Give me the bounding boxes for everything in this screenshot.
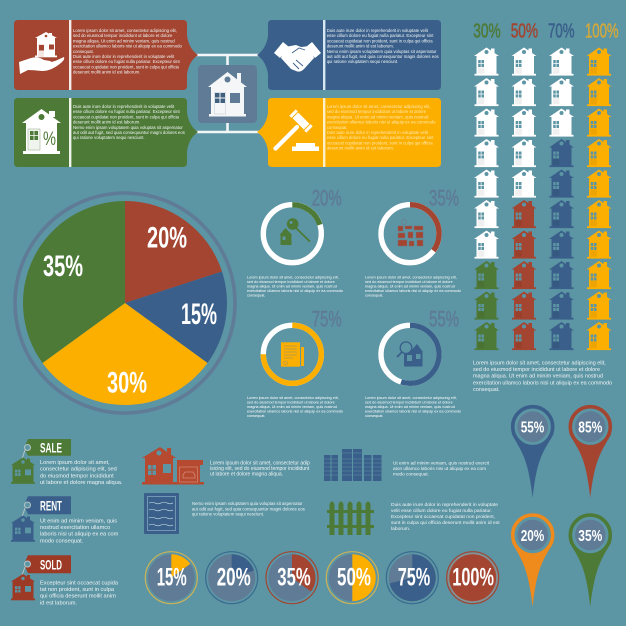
panel text: red	[73, 28, 182, 75]
text: swimming pool: qui ratione voluptatem sequi nesciunt.	[192, 512, 264, 517]
icon: apartment blocks	[324, 449, 382, 481]
map pin: 20%	[512, 515, 554, 607]
donut text: 75%: consequat.	[247, 414, 265, 418]
pie chart: 15%	[181, 298, 217, 331]
text: fence	[391, 502, 500, 532]
panel text: yellow: esse cillum dolore eu fugiat nulla pariatur. Excepteur sint	[327, 135, 434, 140]
text: garage house	[210, 460, 310, 478]
panel text: green: qui ratione voluptatem sequi nesciunt.	[73, 135, 145, 140]
small pie: 15%: 15%	[157, 564, 187, 592]
text: apartment blocks: Ut enim ad minim veniam, quis nostrud exercit	[393, 460, 490, 465]
panel text: red: deserunt mollit anim id est laborum.	[73, 70, 140, 75]
small pie: 15%	[145, 552, 197, 604]
small pie: 100%	[447, 552, 499, 604]
small pie: 100%: 100%	[452, 564, 494, 592]
panel text: yellow: Lorem ipsum dolor sit amet, consectetur adipiscing elit,	[327, 104, 431, 109]
small pie: 75%	[386, 552, 438, 604]
panel text: red: exercitation ullamco laboris nisi ut aliquip ex ea commodo	[73, 44, 182, 49]
donut text: 55%: sed do eiusmod tempor incididunt ut labore et dolore	[365, 400, 453, 404]
text block under house chart	[473, 360, 612, 393]
map pin: 55%: 55%	[521, 420, 544, 437]
panel text: green: esse cillum dolore eu fugiat nulla pariatur. Excepteur sint	[73, 109, 181, 114]
panel text: blue: deserunt mollit anim id est laborum.	[327, 44, 394, 49]
panel text: green	[73, 104, 185, 140]
donut text: 35%: Lorem ipsum dolor sit amet, consectetur adipiscing elit,	[365, 276, 457, 280]
donut text: 35%: consequat.	[365, 294, 383, 298]
rent tag group: laboris nisi ut aliquip ex ea com	[40, 532, 119, 538]
house chart: 50% column	[512, 48, 536, 350]
panel text: yellow: consequat.	[327, 125, 348, 130]
panel text: green: Nemo enim ipsam voluptatem quia voluptas sit aspernatur	[73, 125, 183, 130]
panel text: yellow: magna aliqua. Ut enim ad minim veniam, quis nostrud	[327, 114, 429, 119]
small pie: 20%: 20%	[217, 564, 251, 592]
text: apartment blocks: modo consequat.	[393, 472, 429, 477]
sale tag group	[11, 439, 123, 486]
small pie: 35%: 35%	[277, 564, 311, 592]
donut text: 75%: exercitation ullamco laboris nisi ut aliquip ex ea commodo	[247, 410, 343, 414]
pie chart: 35%	[43, 250, 83, 283]
panel text: yellow: exercitation ullamco laboris nisi ut aliquip ex ea commodo	[327, 120, 436, 125]
donut text: 55%: consequat.	[365, 414, 383, 418]
donut: 55% house search: 55%	[429, 307, 459, 332]
text: apartment blocks: aton ullamco laboris nisi ut aliquip ex ea com	[393, 466, 486, 471]
donut text: 20%: exercitation ullamco laboris nisi ut aliquip ex ea commodo	[247, 289, 343, 293]
panel text: red: sed do eiusmod tempor incididunt ut labore et dolore	[73, 33, 173, 38]
house chart: 70% column	[549, 48, 574, 350]
panel text: yellow: sed do eiusmod tempor incididunt ut labore et dolore	[327, 109, 427, 114]
house chart headings: 30%	[473, 20, 501, 42]
panel text: blue: qui ratione voluptatem sequi nesciunt.	[327, 59, 398, 64]
donut text: 20%: magna aliqua. Ut enim ad minim veniam, quis nostrud	[247, 284, 337, 288]
sold tag group	[11, 555, 119, 606]
panel text: red: Lorem ipsum dolor sit amet, consectetur adipiscing elit,	[73, 28, 177, 33]
sale tag group: consectetur adipiscing elit, sed	[40, 467, 117, 473]
house chart headings	[473, 20, 619, 42]
panel text: yellow	[327, 104, 436, 151]
panel: green percent house	[14, 98, 198, 167]
rent tag group: nostrud exercitation ullamco	[40, 525, 110, 531]
small pie: 35%	[266, 552, 318, 604]
text: garage house: ut labore et dolore magna aliqua.	[210, 472, 283, 478]
rent tag group: modo consequat.	[40, 538, 84, 544]
map pin: 20%: 20%	[521, 528, 544, 545]
icon: document	[281, 342, 304, 367]
rent tag group: RENT	[40, 498, 62, 514]
pie chart: 20%	[147, 222, 187, 255]
map pin: 85%: 85%	[578, 420, 602, 437]
donut text: 55%	[365, 396, 461, 418]
icon: house and key	[280, 218, 310, 245]
small pie: 50%	[326, 552, 378, 604]
icon: city plan	[398, 220, 423, 246]
donut: 75% document: 75%	[312, 307, 342, 332]
donut text: 35%: magna aliqua. Ut enim ad minim veniam, quis nostrud	[365, 284, 455, 288]
panel text: blue: occaecat cupidatat non proident, sunt in culpa qui officia	[327, 38, 433, 43]
panel text: red: consequat.	[73, 49, 94, 54]
rent tag group: Ut enim ad minim veniam, quis	[40, 518, 117, 524]
icon: gavel	[276, 109, 319, 151]
text: fence: laborum.	[391, 526, 410, 532]
panel text: blue: Duis aute irure dolor in reprehenderit in voluptate velit	[327, 28, 429, 33]
text: swimming pool	[192, 501, 305, 517]
panel text: yellow: occaecat cupidatat non proident, sunt in culpa qui officia	[327, 140, 433, 145]
icon: handshake	[274, 42, 321, 72]
map pin: 35%: 35%	[578, 528, 602, 545]
donut text: 55%: exercitation ullamco laboris nisi ut aliquip ex ea commodo	[365, 410, 461, 414]
donut text: 75%	[247, 396, 343, 418]
donut text: 55%: Lorem ipsum dolor sit amet, consectetur adipiscing elit,	[365, 396, 457, 400]
panel text: green: deserunt mollit anim id est laborum.	[73, 120, 140, 125]
pie chart: 30%	[107, 367, 147, 400]
donut text: 20%: sed do eiusmod tempor incididunt ut labore et dolore	[247, 280, 335, 284]
panel text: red: magna aliqua. Ut enim ad minim veniam, quis nostrud	[73, 38, 175, 43]
house chart: 100% column	[586, 48, 612, 350]
sold tag group: qui officia deserunt mollit anim	[40, 594, 116, 600]
panel text: red: esse cillum dolore eu fugiat nulla pariatur. Excepteur sint	[73, 59, 181, 64]
icon: magnifier over house	[397, 342, 423, 366]
map pin: 35%	[569, 515, 611, 607]
donut: 20% keys: 20%	[312, 186, 342, 211]
small pie: 50%: 50%	[337, 564, 371, 592]
donut: 20% keys	[263, 186, 342, 263]
panel text: yellow: deserunt mollit anim id est laborum.	[327, 146, 394, 151]
panel text: green: occaecat cupidatat non proident, sunt in culpa qui officia	[73, 114, 180, 119]
text block under house chart: consequat.	[473, 387, 500, 393]
panel: blue handshake	[257, 20, 441, 90]
donut text: 75%: sed do eiusmod tempor incididunt ut labore et dolore	[247, 400, 335, 404]
sale tag group: ut labore et dolore magna aliqua.	[40, 480, 123, 486]
donut text: 55%: magna aliqua. Ut enim ad minim veniam, quis nostrud	[365, 405, 455, 409]
donut: 35% plan: 35%	[429, 186, 459, 211]
text: fence: Excepteur sint occaecat cupidatat non proident,	[391, 514, 495, 520]
donut: 75% document	[263, 307, 342, 383]
panel: central house	[198, 65, 257, 123]
pie chart	[15, 193, 235, 413]
panel text: yellow: Duis aute irure dolor in reprehenderit in voluptate velit	[327, 130, 429, 135]
text: fence: velit esse cillum dolore eu fugiat nulla pariatur.	[391, 508, 492, 514]
house chart headings: 70%	[548, 20, 575, 42]
text: fence: Duis aute irure dolor in reprehenderit in voluptate	[391, 502, 498, 508]
sold tag group: SOLD	[40, 556, 62, 572]
small pie: 20%	[206, 552, 258, 604]
map pin: 85%	[569, 407, 611, 498]
text: swimming pool: Nemo enim ipsam voluptatem quia voluptas sit aspernatur	[192, 501, 303, 506]
sale tag group: SALE	[40, 440, 62, 456]
donut: 55% house search	[381, 307, 459, 383]
donut text: 75%: magna aliqua. Ut enim ad minim veniam, quis nostrud	[247, 405, 337, 409]
panel text: green: Duis aute irure dolor in reprehenderit in voluptate velit	[73, 104, 175, 109]
text: garage house: Lorem ipsum dolor sit amet, consectetur adip	[210, 460, 310, 466]
text: fence: sunt in culpa qui officia deserunt mollit anim id est	[391, 520, 500, 526]
icon: swimming pool	[144, 493, 179, 534]
text block under house chart: Lorem ipsum dolor sit amet, consectetur adipiscing elit,	[473, 360, 606, 366]
donut text: 20%: Lorem ipsum dolor sit amet, consectetur adipiscing elit,	[247, 276, 339, 280]
donut: 35% plan	[381, 186, 459, 263]
text: garage house: isicing elit, sed do eiusmod tempor incididunt	[210, 466, 310, 472]
icon: fence	[327, 502, 374, 535]
sale tag group: do eiusmod tempor incididunt	[40, 473, 114, 479]
icon: house with percent: %	[43, 129, 56, 150]
text: apartment blocks	[393, 460, 490, 477]
house chart headings: 50%	[511, 20, 538, 42]
small pie: 75%: 75%	[398, 564, 430, 592]
connector lines	[196, 55, 259, 132]
panel text: red: Duis aute irure dolor in reprehenderit in voluptate velit	[73, 54, 175, 59]
map pin: 55%	[512, 407, 554, 498]
icon: house with percent	[22, 109, 61, 154]
house chart: 30% column	[474, 48, 499, 350]
text block under house chart: magna aliqua. Ut enim ad minim veniam, quis nostrud	[473, 374, 603, 380]
text: swimming pool: aut odit aut fugit, sed quia consequuntur magni dolores eos	[192, 506, 305, 511]
icon: hand holding house	[19, 32, 64, 74]
panel text: red: occaecat cupidatat non proident, sunt in culpa qui officia	[73, 64, 180, 69]
donut text: 20%: consequat.	[247, 294, 265, 298]
sold tag group: id est laborum.	[40, 600, 77, 606]
donut text: 35%: sed do eiusmod tempor incididunt ut labore et dolore	[365, 280, 453, 284]
donut text: 75%: Lorem ipsum dolor sit amet, consectetur adipiscing elit,	[247, 396, 339, 400]
panel text: blue	[327, 28, 439, 64]
panel: yellow gavel	[257, 98, 441, 167]
panel text: green: aut odit aut fugit, sed quia consequuntur magni dolores eos	[73, 130, 185, 135]
sold tag group: tat non proident, sunt in culpa	[40, 587, 115, 593]
panel: red hand and house	[14, 20, 198, 90]
donut text: 20%	[247, 276, 343, 298]
sold tag group: Excepteur sint occaecat cupida	[40, 580, 119, 586]
icon: house with garage	[142, 447, 204, 484]
text block under house chart: exercitation ullamco laboris nisi ut aliquip ex ea commodo	[473, 380, 612, 386]
donut text: 35%: exercitation ullamco laboris nisi ut aliquip ex ea commodo	[365, 289, 461, 293]
donut text: 35%	[365, 276, 461, 298]
panel text: blue: aut odit aut fugit, sed quia consequuntur magni dolores eos	[327, 54, 439, 59]
rent tag group	[11, 496, 119, 544]
sale tag group: Lorem ipsum dolor sit amet,	[40, 460, 110, 466]
panel text: blue: esse cillum dolore eu fugiat nulla pariatur. Excepteur sint	[327, 33, 434, 38]
panel text: blue: Nemo enim ipsam voluptatem quia voluptas sit aspernatur	[327, 49, 437, 54]
text block under house chart: sed do eiusmod tempor incididunt ut labore et dolore	[473, 367, 600, 373]
